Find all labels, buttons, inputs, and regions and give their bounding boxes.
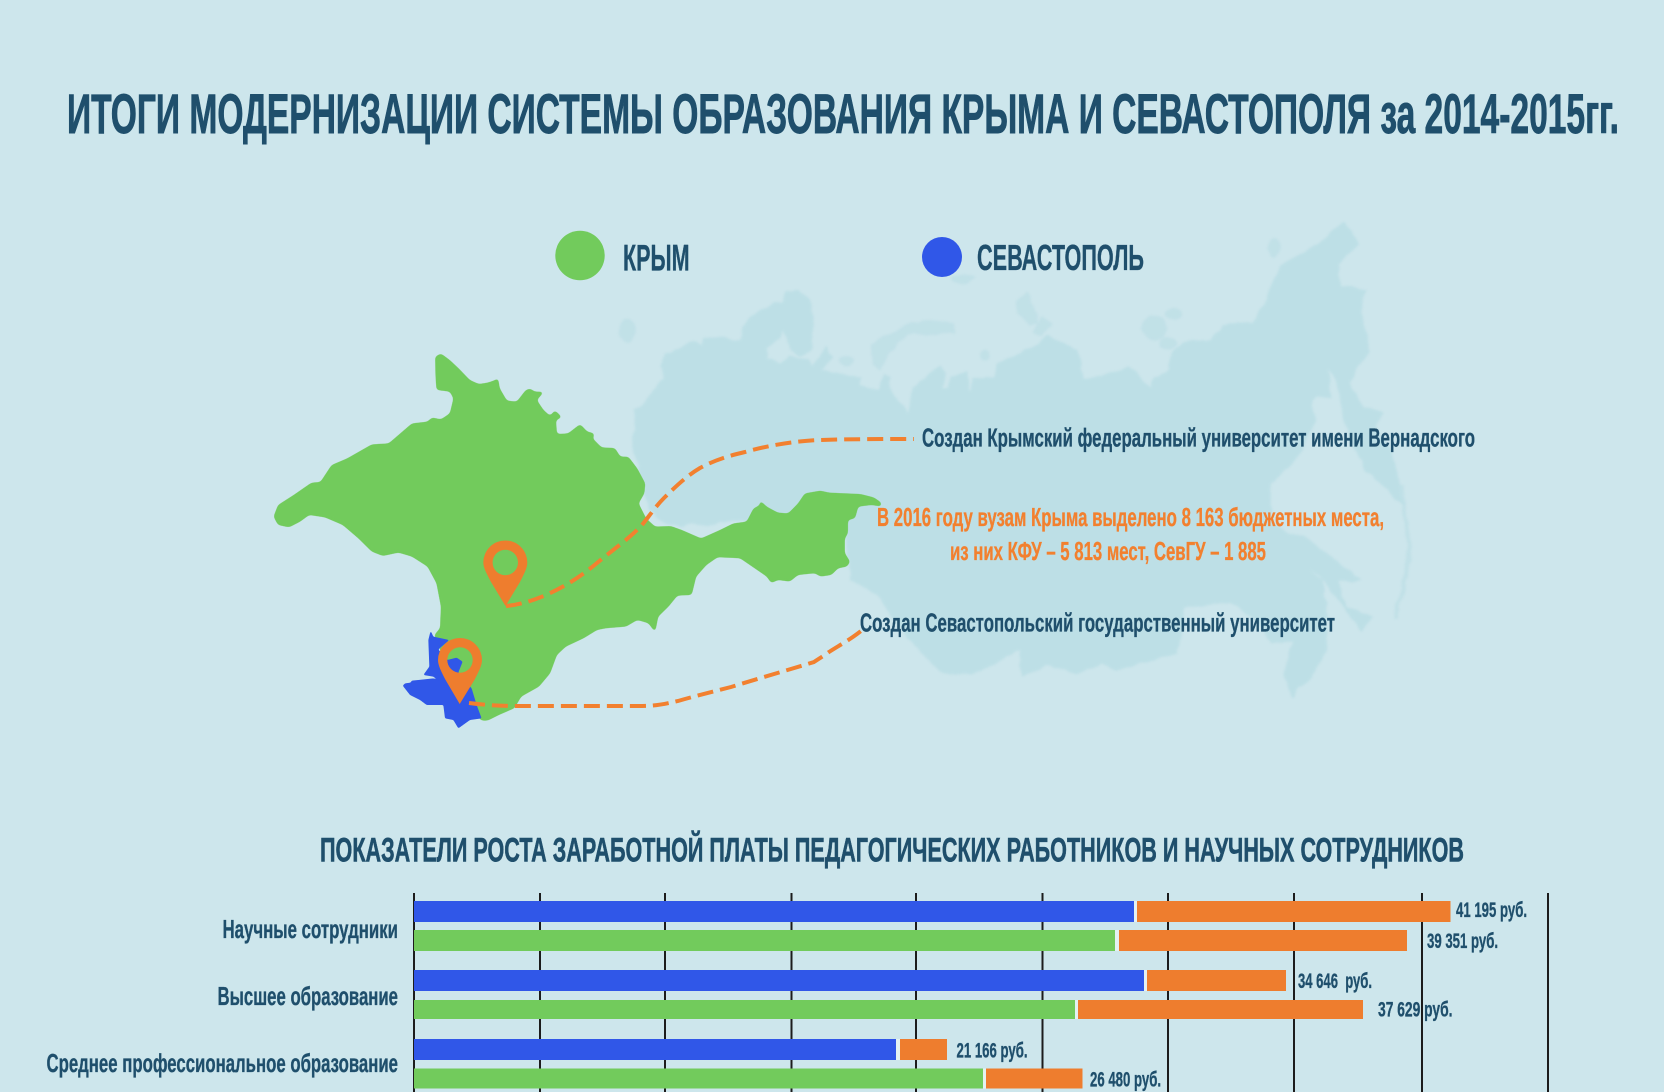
callout: budget places: В 2016 году вузам Крыма выделено 8 163 бюджетных места,	[877, 502, 1384, 532]
pin: Crimean university	[483, 540, 527, 606]
row: higher education	[218, 970, 1452, 1022]
callout: Sevastopol state university: Создан Севастопольский государственный университет	[860, 608, 1335, 638]
legend marker: Sevastopol	[922, 237, 962, 277]
legend marker: Crimea	[555, 231, 605, 280]
map: Russia silhouette background	[621, 223, 1410, 697]
row: higher education: 37 629 руб.	[1378, 998, 1452, 1022]
callout: budget places	[877, 502, 1384, 566]
row: research staff	[222, 899, 1527, 953]
region: Crimea	[273, 353, 881, 721]
row: vocational education: Среднее профессиональное образование	[46, 1048, 398, 1078]
row: research staff: 39 351 руб.	[1427, 930, 1498, 953]
row: vocational education: 26 480 руб.	[1090, 1068, 1161, 1092]
row: higher education: 34 646 руб.	[1298, 970, 1372, 993]
dashed line: Crimean university	[506, 439, 914, 606]
row: vocational education: 21 166 руб.	[956, 1040, 1028, 1062]
bar chart: salaries	[46, 893, 1548, 1092]
row: higher education: Высшее образование	[218, 981, 398, 1011]
row: vocational education	[46, 1039, 1161, 1092]
row: research staff: 41 195 руб.	[1456, 899, 1527, 922]
legend label: Crimea: КРЫМ	[623, 238, 690, 278]
region: Sevastopol	[403, 631, 482, 728]
dashed line: Sevastopol university	[469, 631, 861, 706]
legend	[555, 231, 1144, 280]
legend label: Sevastopol: СЕВАСТОПОЛЬ	[977, 237, 1144, 278]
row: research staff: Научные сотрудники	[222, 914, 398, 944]
pin: Sevastopol university	[438, 638, 482, 704]
callout: budget places: из них КФУ – 5 813 мест, СевГУ – 1 885	[950, 536, 1266, 566]
map: Crimea and Sevastopol	[273, 353, 914, 728]
